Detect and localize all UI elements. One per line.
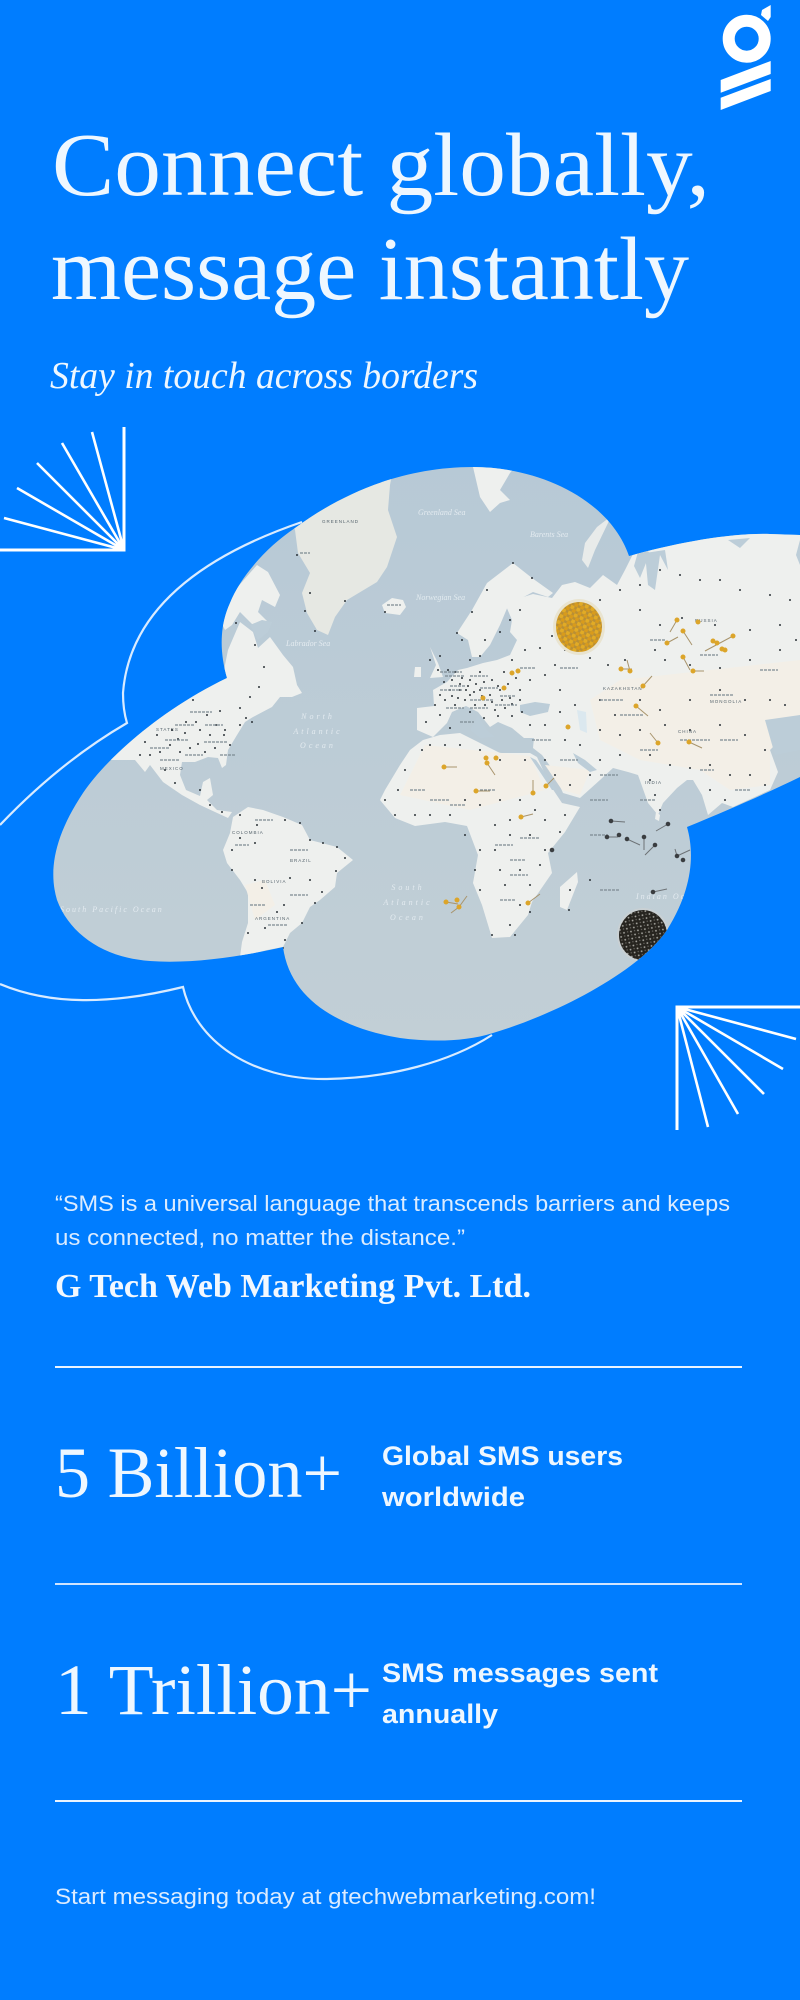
ocean labels: Ocean xyxy=(300,741,336,750)
black pin dish xyxy=(617,908,669,962)
quote: us connected, no matter the distance.” xyxy=(55,1225,465,1250)
inland and northern seas xyxy=(250,538,800,790)
country labels: MEXICO xyxy=(160,766,184,771)
warm desert and steppe tint xyxy=(246,742,773,895)
stat: 5 billion: worldwide xyxy=(381,1482,525,1512)
ocean labels: South xyxy=(391,883,425,892)
ocean labels: Barents Sea xyxy=(530,530,568,539)
country labels: ARGENTINA xyxy=(255,916,290,921)
quote: “SMS is a universal language that transcends barriers and keeps xyxy=(55,1191,730,1216)
country labels xyxy=(156,519,742,921)
stat: 5 billion xyxy=(55,1433,623,1513)
ocean labels xyxy=(60,508,704,922)
country labels: BRAZIL xyxy=(290,858,312,863)
world map in cloud shape xyxy=(40,455,800,1050)
subtitle: Stay in touch across borders xyxy=(50,355,478,397)
stat: 1 trillion: SMS messages sent xyxy=(382,1658,658,1688)
ocean labels: Greenland Sea xyxy=(418,508,465,517)
stat: 5 billion: 5 Billion+ xyxy=(55,1433,342,1513)
country labels: RUSSIA xyxy=(695,618,718,623)
map text marks xyxy=(150,553,778,925)
ocean labels: Atlantic xyxy=(292,727,343,736)
title: message instantly xyxy=(51,220,689,319)
ocean labels: Atlantic xyxy=(382,898,433,907)
stat: 1 trillion xyxy=(55,1650,658,1730)
country labels: GREENLAND xyxy=(322,519,359,524)
stat: 1 trillion: annually xyxy=(382,1699,498,1729)
ocean labels: Norwegian Sea xyxy=(415,593,465,602)
land masses xyxy=(100,455,800,957)
stat: 1 trillion: 1 Trillion+ xyxy=(55,1650,372,1730)
ocean labels: Labrador Sea xyxy=(285,639,330,648)
black pins xyxy=(552,821,690,892)
divider 2 xyxy=(55,1583,742,1585)
cloud outline behind map xyxy=(0,522,492,1079)
divider 3 xyxy=(55,1800,742,1802)
fan decoration: top left xyxy=(0,427,124,550)
city markers xyxy=(140,555,796,948)
gold pin dish xyxy=(553,599,605,655)
quote attribution: G Tech Web Marketing Pvt. Ltd. xyxy=(55,1268,531,1305)
fan decoration: bottom right xyxy=(677,1007,800,1130)
country labels: KAZAKHSTAN xyxy=(603,686,643,691)
ocean labels: North xyxy=(300,712,335,721)
country labels: MONGOLIA xyxy=(710,699,742,704)
country labels: COLOMBIA xyxy=(232,830,264,835)
country labels: INDIA xyxy=(645,780,662,785)
country labels: CHINA xyxy=(678,729,697,734)
quote xyxy=(55,1191,730,1250)
stat: 5 billion: Global SMS users xyxy=(382,1441,623,1471)
logo xyxy=(721,5,771,110)
divider 1 xyxy=(55,1366,742,1368)
gold pins xyxy=(444,620,733,913)
title: Connect globally, xyxy=(52,116,710,215)
country labels: STATES xyxy=(156,727,179,732)
ocean xyxy=(40,460,800,1050)
title xyxy=(51,116,710,319)
ocean labels: South Pacific Ocean xyxy=(60,905,164,914)
ocean labels: Indian Ocean xyxy=(635,892,704,901)
country labels: BOLIVIA xyxy=(262,879,287,884)
ocean labels: Ocean xyxy=(390,913,426,922)
footer call to action: Start messaging today at gtechwebmarketing.com! xyxy=(55,1884,596,1909)
